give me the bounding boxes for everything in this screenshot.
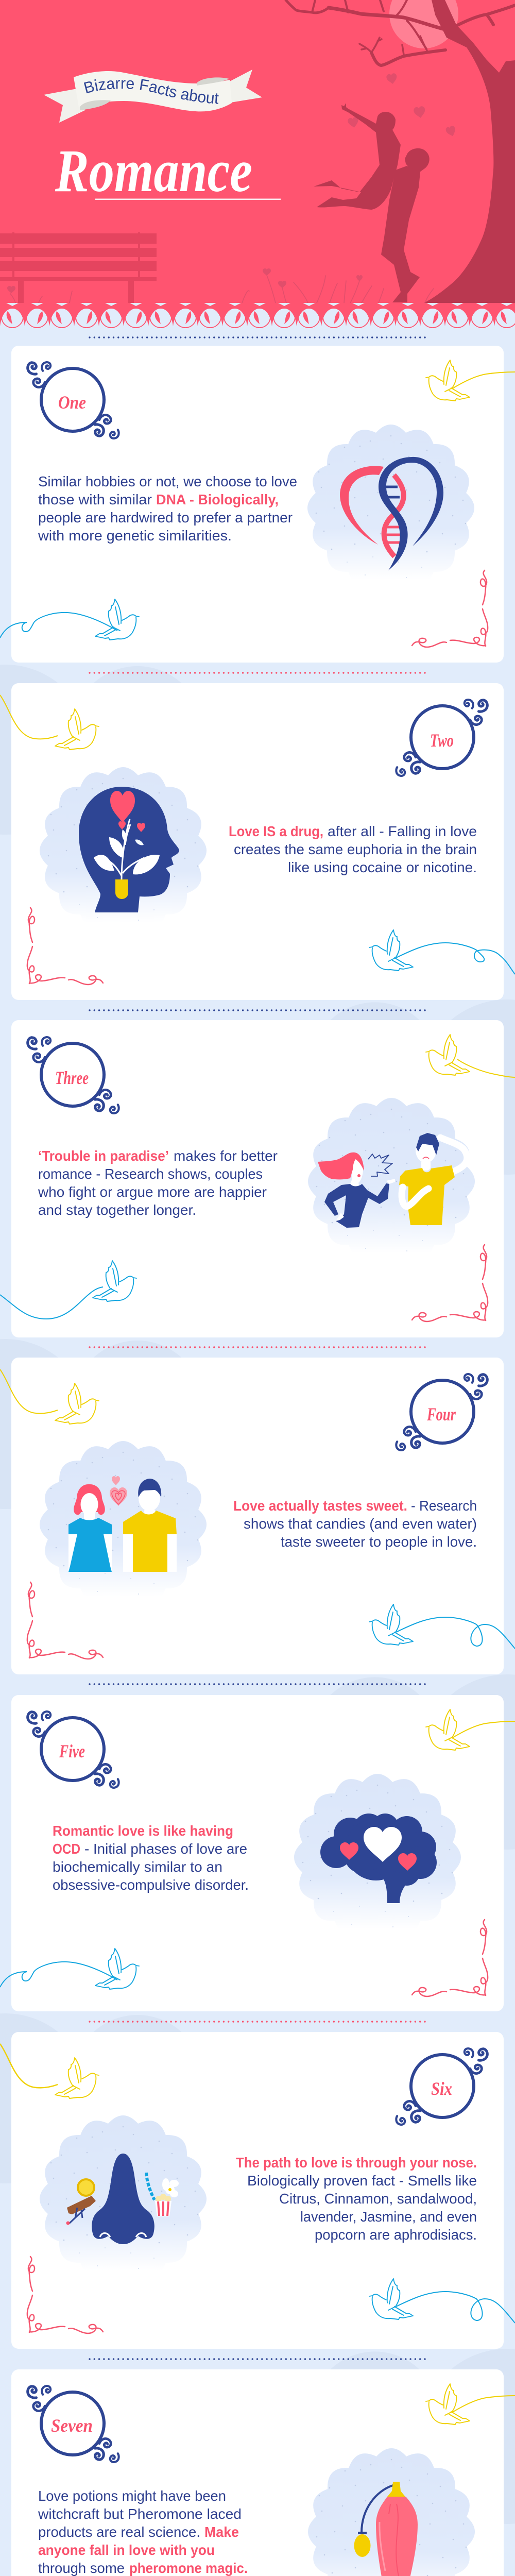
- panel: fact three: [0, 1020, 515, 1337]
- number frame: Four: [396, 1374, 489, 1450]
- number frame: Five: [26, 1711, 119, 1788]
- text: fact six: [236, 2155, 477, 2243]
- dove: blue bottom left: [0, 599, 139, 640]
- grass flower hearts: [7, 268, 363, 293]
- text: fact four: Love actually tastes sweet.: [233, 1498, 407, 1514]
- text: fact one: those with similar: [38, 492, 152, 507]
- moon: [389, 0, 458, 48]
- dove: yellow top right: [426, 360, 515, 401]
- falling hearts: [347, 73, 457, 138]
- dove: yellow top right: [426, 2384, 515, 2425]
- background shapes: [0, 665, 515, 2576]
- dove: yellow top left: [0, 2044, 99, 2098]
- dove: blue bottom left: [0, 1261, 136, 1319]
- text: fact two: [229, 823, 477, 875]
- text: fact seven: products are real science.: [38, 2524, 200, 2540]
- illustration: brain with hearts: [294, 1774, 461, 1941]
- text: fact six: Citrus, Cinnamon, sandalwood,: [279, 2191, 477, 2207]
- number frame: One: One: [58, 392, 86, 413]
- corner flourish: [27, 1582, 103, 1659]
- divider dots: [90, 1009, 426, 1011]
- divider dots: [90, 672, 426, 674]
- subtitle text: Bizarre Facts about: [83, 79, 219, 104]
- text: fact four: [233, 1498, 477, 1550]
- text: fact two: Love IS a drug,: [229, 823, 323, 839]
- panel: fact four: [0, 1358, 515, 1674]
- number frame: Five: Five: [59, 1741, 85, 1761]
- text: fact seven: through some: [38, 2560, 125, 2576]
- number frame: Three: Three: [55, 1067, 89, 1088]
- dove: yellow top right: [426, 1035, 515, 1077]
- text: fact three: [38, 1148, 278, 1218]
- panel: fact six: [0, 2032, 515, 2349]
- divider dots: [90, 1346, 426, 1348]
- text: fact one: Similar hobbies or not, we choose to love: [38, 473, 297, 489]
- text: fact six: lavender, Jasmine, and even: [300, 2209, 477, 2225]
- text: fact six: popcorn are aphrodisiacs.: [315, 2227, 477, 2243]
- text: fact five: obsessive-compulsive disorder.: [53, 1877, 249, 1893]
- text: fact three: makes for better: [174, 1148, 278, 1164]
- panel: fact five: [0, 1695, 515, 2011]
- dove: blue bottom left: [0, 1948, 139, 1989]
- dove: blue bottom right: [369, 2279, 515, 2323]
- bench: [0, 232, 157, 303]
- dove: yellow top left: [0, 1369, 99, 1424]
- text: fact two: creates the same euphoria in the brain: [234, 841, 477, 857]
- tree silhouette: [286, 0, 515, 303]
- dove: blue bottom right: [369, 1604, 515, 1649]
- illustration: head with plant: [40, 767, 207, 934]
- illustration: DNA heart: [307, 425, 474, 591]
- corner flourish: [27, 908, 103, 985]
- text: fact seven: pheromone magic.: [129, 2560, 248, 2576]
- text: fact two: like using cocaine or nicotine.: [288, 859, 477, 875]
- text: fact seven: anyone fall in love with you: [38, 2542, 215, 2558]
- divider dots: [90, 2358, 426, 2360]
- illustration: arguing couple: [308, 1098, 475, 1265]
- title underline: [95, 199, 281, 200]
- text: fact three: and stay together longer.: [38, 1202, 196, 1218]
- panel: fact one: [0, 346, 515, 663]
- number frame: One: [26, 362, 119, 438]
- divider dots: [90, 2021, 426, 2023]
- number frame: Seven: [26, 2385, 119, 2462]
- text: fact three: romance - Research shows, couples: [38, 1166, 263, 1182]
- text: fact one: with more genetic similarities.: [38, 528, 232, 544]
- illustration: couple with hearts: [40, 1441, 207, 1608]
- text: fact seven: Make: [204, 2524, 239, 2540]
- panel: hero header: [0, 0, 515, 303]
- text: fact five: [53, 1823, 249, 1893]
- corner flourish: [27, 2257, 103, 2333]
- panel: fact two: [0, 683, 515, 1000]
- ribbon banner: [44, 70, 262, 123]
- illustration: nose and scents: [40, 2115, 207, 2282]
- number frame: Two: [396, 699, 489, 776]
- number frame: Four: Four: [426, 1404, 456, 1425]
- dove: yellow top left: [0, 695, 99, 750]
- text: fact seven: Love potions might have been: [38, 2488, 226, 2504]
- text: fact one: people are hardwired to prefer a partner: [38, 510, 293, 526]
- number frame: Six: [396, 2048, 489, 2125]
- text: fact four: taste sweeter to people in love.: [281, 1534, 477, 1550]
- text: fact seven: [38, 2488, 248, 2576]
- grass and flowers: [10, 275, 434, 303]
- dove: blue bottom right: [369, 930, 515, 974]
- number frame: Three: [26, 1037, 119, 1113]
- text: fact three: ‘Trouble in paradise’: [38, 1148, 169, 1164]
- divider dots: [90, 336, 426, 338]
- corner flourish: [412, 1245, 488, 1321]
- text: fact one: [38, 473, 297, 544]
- text: fact two: after all - Falling in love: [328, 823, 477, 839]
- divider dots: [90, 1683, 426, 1685]
- text: fact six: Biologically proven fact - Smells like: [247, 2173, 477, 2189]
- illustration: perfume bottle: [308, 2448, 475, 2576]
- text: fact four: - Research: [411, 1498, 477, 1514]
- couple silhouette: [314, 103, 430, 302]
- corner flourish: [412, 1920, 488, 1996]
- text: fact seven: witchcraft but Pheromone laced: [38, 2506, 242, 2522]
- text: fact one: DNA - Biologically,: [156, 492, 279, 507]
- panel: fact seven: [0, 2369, 515, 2576]
- text: fact five: Romantic love is like having: [53, 1823, 233, 1839]
- dove: yellow top right: [426, 1709, 515, 1750]
- top ornamental band: [0, 303, 515, 328]
- text: fact five: - Initial phases of love are: [84, 1841, 247, 1857]
- corner flourish: [412, 570, 488, 647]
- title: Romance: [55, 137, 252, 205]
- number frame: Six: Six: [431, 2078, 452, 2099]
- text: fact three: who fight or argue more are happier: [38, 1184, 267, 1200]
- text: fact six: The path to love is through your nose.: [236, 2155, 477, 2171]
- text: fact four: shows that candies (and even water): [244, 1516, 477, 1532]
- text: fact five: biochemically similar to an: [53, 1859, 222, 1875]
- number frame: Two: Two: [430, 730, 454, 751]
- text: fact five: OCD: [53, 1841, 80, 1857]
- number frame: Seven: Seven: [51, 2415, 93, 2436]
